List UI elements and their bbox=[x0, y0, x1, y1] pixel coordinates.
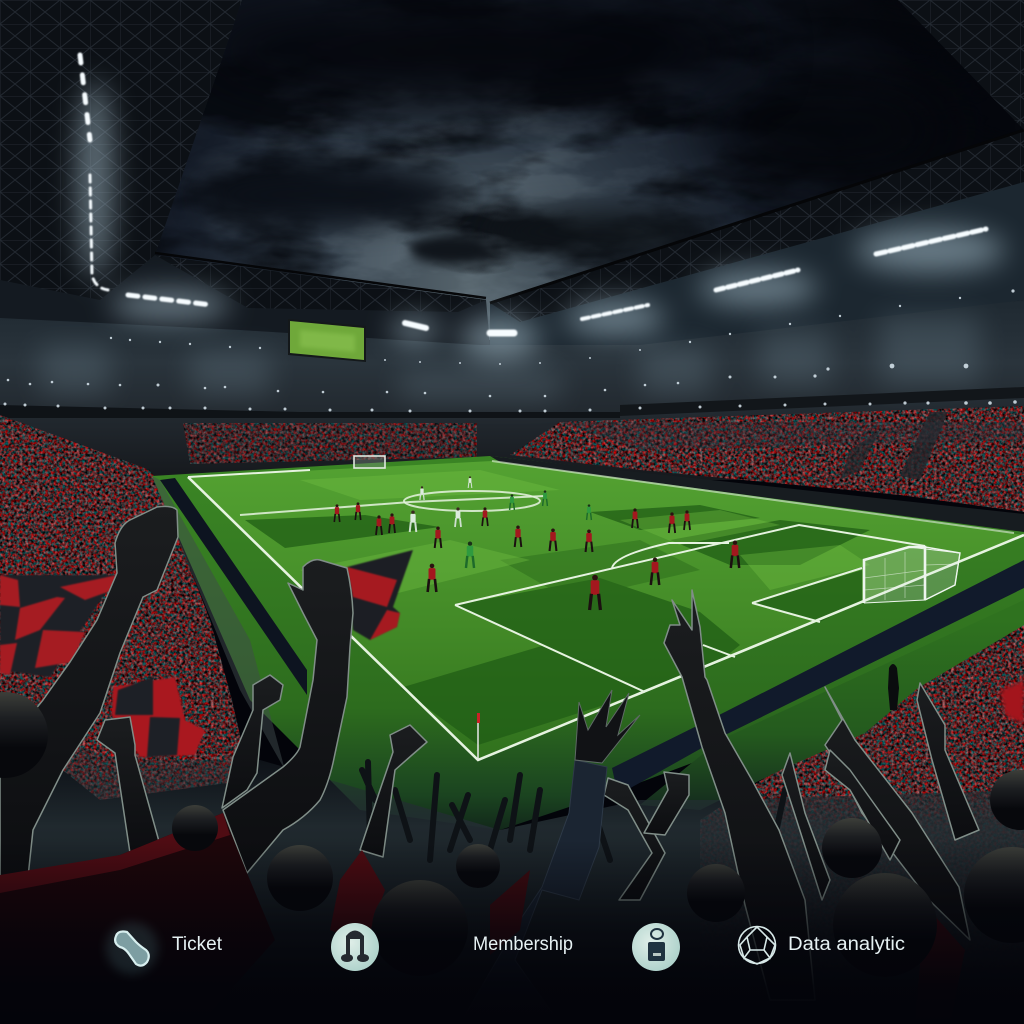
floodlights bbox=[4, 55, 1017, 412]
far goal bbox=[354, 456, 385, 468]
pitch surround and outer grass bbox=[152, 456, 1024, 830]
icon: lock bag bbox=[632, 923, 680, 971]
mid crowd silhouettes bbox=[0, 720, 1024, 1024]
left roof structure bbox=[0, 0, 490, 345]
icon: data network ball bbox=[738, 926, 776, 964]
label: ticket: Ticket bbox=[172, 934, 223, 955]
pitch with markings bbox=[188, 461, 1024, 760]
label: membership: Membership bbox=[473, 934, 573, 955]
fan in navy sleeve with open hand bbox=[460, 690, 640, 1024]
corner flag bbox=[477, 713, 480, 760]
scoreboard bbox=[288, 319, 366, 362]
icon: ticket bbox=[106, 922, 158, 974]
goal bbox=[864, 547, 960, 603]
night sky with clouds bbox=[0, 0, 1024, 340]
flags bbox=[0, 550, 1024, 757]
raised arms and hands bbox=[0, 506, 979, 1000]
right roof structure bbox=[490, 0, 1024, 345]
fan in red shirt bbox=[0, 813, 965, 1024]
upper stands bbox=[0, 300, 1024, 480]
players bbox=[334, 476, 899, 710]
label: data analytic: Data analytic bbox=[788, 934, 905, 955]
icon: membership bbox=[331, 923, 379, 971]
bottom dark fade bbox=[0, 840, 1024, 1024]
red crowd stands bbox=[0, 406, 1024, 1024]
foreground heads bbox=[0, 692, 1024, 977]
